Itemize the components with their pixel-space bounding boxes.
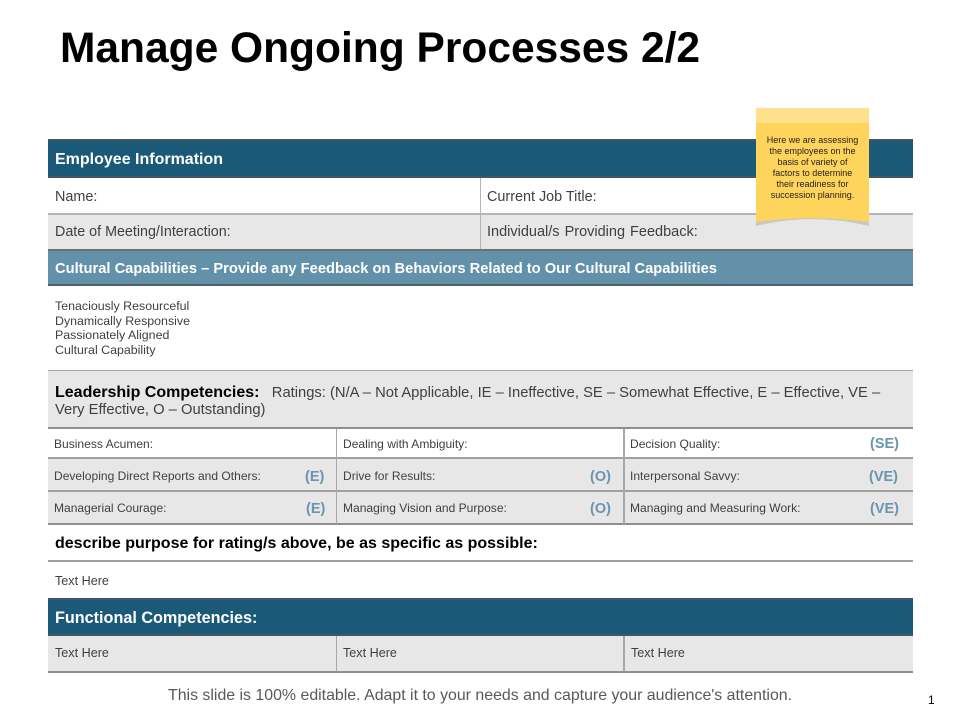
row: managerial courage: Managing and Measuring Work: (630, 501, 801, 515)
row: managerial courage: (E) (306, 501, 325, 517)
row: functional competencies: Text Here (55, 646, 109, 660)
text block: cultural capabilities list: Tenaciously Resourceful (55, 299, 189, 313)
text block: describe purpose: describe purpose for rating/s above, be as specific as possible: (55, 535, 538, 552)
header: cultural capabilities: Cultural Capabilities – Provide any Feedback on Behaviors Related to Our Cultural Capabilities (55, 261, 717, 277)
row: functional competencies (48, 636, 913, 673)
text block: cultural capabilities list: Cultural Capability (55, 342, 156, 356)
callout text: their readiness for (776, 178, 849, 188)
row: managerial courage: Managing Vision and Purpose: (343, 501, 507, 515)
text block: describe purpose (48, 525, 913, 562)
row: direct reports (48, 459, 913, 492)
callout text: succession planning. (771, 190, 854, 200)
panel: employee information (48, 139, 913, 251)
row: meeting date and feedback: Individual/s Providing Feedback: (487, 224, 698, 240)
callout: sticky note (756, 108, 869, 226)
panel: competency ratings grid (48, 429, 913, 525)
row: business acumen: Business Acumen: (54, 437, 153, 451)
panel: leadership competencies ratings: Very Effective, O – Outstanding) (55, 402, 265, 418)
callout text: Here we are assessing (767, 134, 858, 144)
row: business acumen: (SE) (870, 436, 899, 452)
row: direct reports: Developing Direct Reports and Others: (54, 469, 261, 483)
text block: text here: Text Here (55, 574, 109, 588)
row: name and job title: Current Job Title: (487, 189, 597, 205)
panel: functional competencies (48, 598, 913, 673)
row: direct reports: Drive for Results: (343, 469, 435, 483)
row: meeting date and feedback: Date of Meeting/Interaction: (55, 224, 231, 240)
row: direct reports: (E) (305, 469, 324, 485)
row: functional competencies: Text Here (631, 646, 685, 660)
row: managerial courage (48, 492, 913, 525)
text block: cultural capabilities list: Passionately Aligned (55, 328, 169, 342)
header: employee information: Employee Information (55, 151, 223, 168)
row: direct reports: Interpersonal Savvy: (630, 469, 740, 483)
row: business acumen: Decision Quality: (630, 437, 720, 451)
callout text: the employees on the (769, 146, 856, 156)
row: direct reports: (O) (590, 469, 611, 485)
callout text (767, 134, 858, 200)
row: business acumen (48, 429, 913, 459)
footer note: This slide is 100% editable. Adapt it to your needs and capture your audience's attention. (168, 687, 792, 704)
text block: cultural capabilities list: Dynamically Responsive (55, 314, 190, 328)
row: meeting date and feedback (48, 215, 913, 251)
callout text: basis of variety of (777, 156, 848, 166)
row: business acumen: Dealing with Ambiguity: (343, 437, 468, 451)
panel: leadership competencies ratings: Leadership Competencies: Ratings: (N/A – Not Applicable, IE – Ineffective, SE – Somewhat Effective, E – Effective, VE – (55, 384, 880, 401)
row: managerial courage: (O) (590, 501, 611, 517)
row: direct reports: (VE) (869, 469, 898, 485)
row: managerial courage: (VE) (870, 501, 899, 517)
callout text: factors to determine (773, 168, 852, 178)
header: functional competencies (48, 598, 913, 636)
header: cultural capabilities (48, 251, 913, 286)
title: Manage Ongoing Processes 2/2 (60, 25, 700, 72)
header: functional competencies: Functional Competencies: (55, 609, 257, 627)
page number: 1 (928, 693, 935, 707)
row: name and job title (48, 178, 913, 215)
header: employee information (48, 139, 913, 178)
text block: cultural capabilities list (55, 299, 190, 356)
row: managerial courage: Managerial Courage: (54, 501, 167, 515)
row: name and job title: Name: (55, 189, 97, 205)
row: functional competencies: Text Here (343, 646, 397, 660)
panel: leadership competencies ratings (48, 370, 913, 429)
